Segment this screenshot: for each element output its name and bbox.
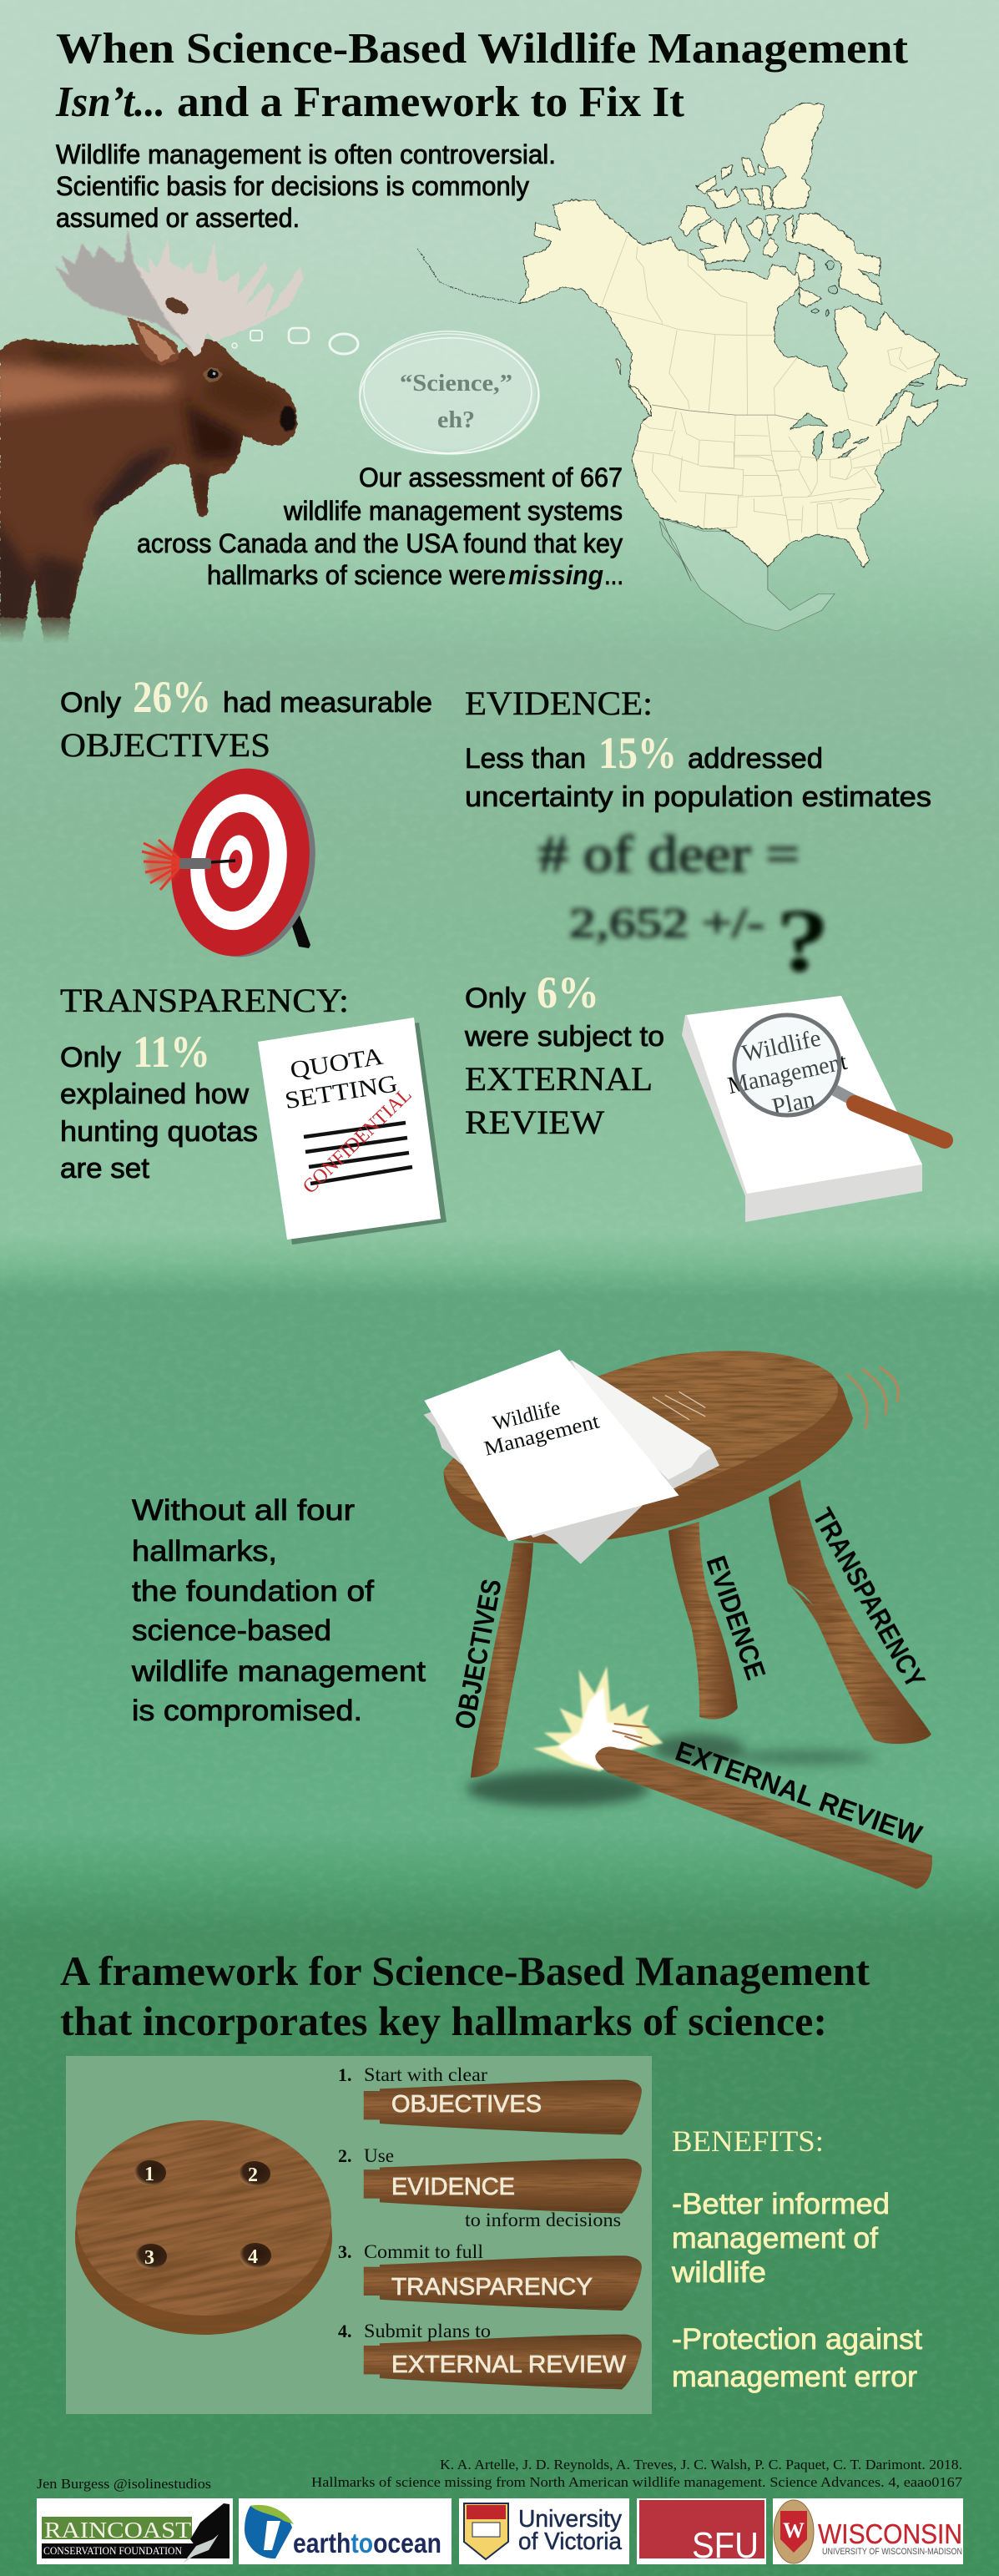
blurred deer estimate: # of deer = [538,826,800,883]
external review text [464,967,664,1141]
moose nose [280,407,295,432]
objectives text: Only [60,687,121,719]
step 3: 3. [338,2241,352,2262]
evidence text [465,684,931,813]
thought text: “Science,” [400,370,512,397]
step 2 [338,2145,642,2230]
objectives text: 26% [133,672,211,722]
title: Isn’t... [55,78,165,126]
seat side [444,1351,853,1543]
leg socket 1: 1 [144,2164,154,2185]
framework heading: that incorporates key hallmarks of science: [60,1998,827,2044]
transparency text: Only [60,1042,121,1073]
logo: University of Victoria: University [518,2506,622,2533]
logo: Wisconsin: W [783,2518,805,2543]
assessment text: ... [604,560,623,590]
moose coat shading [0,342,290,626]
leg: objectives [471,1543,533,1777]
benefits: management of [672,2222,878,2255]
compromised text: the foundation of [132,1575,374,1608]
logo: earthtoocean [239,2498,452,2564]
leg socket 1 [134,2160,166,2185]
antler hole [163,295,191,318]
assessment text: missing [508,560,603,590]
blurred deer estimate [538,826,830,991]
credits: Jen Burgess @isolinestudios [37,2476,211,2492]
step 4: 4. [338,2321,352,2341]
leg socket 3: 3 [144,2247,154,2269]
paper top [424,1350,679,1541]
intro text: assumed or asserted. [56,203,300,233]
panel: framework diagram [66,2056,652,2414]
objectives text: OBJECTIVES [60,726,270,764]
thought text: eh? [437,407,475,433]
redacted lines [304,1123,412,1184]
icon: target with dart [142,759,329,967]
benefits: -Protection against [672,2323,922,2356]
benefits: -Better informed [672,2188,890,2220]
seat top [444,1351,838,1510]
compromised text [131,1494,426,1727]
moose antlers [54,230,303,356]
logo: Wisconsin [773,2498,963,2564]
plan title: Wildlife [739,1025,823,1068]
assessment text: across Canada and the USA found that key [137,528,623,558]
step 1: Start with clear [364,2064,487,2085]
assessment text [137,462,623,590]
logo: University of Victoria [459,2498,629,2564]
benefits [671,2124,922,2393]
document heading: SETTING [283,1070,399,1114]
step 1: OBJECTIVES [391,2091,542,2118]
moose eye [204,368,222,381]
logo: Raincoast [37,2498,233,2564]
framework heading: A framework for Science-Based Management [60,1947,870,1994]
evidence text: Less than [465,743,586,775]
transparency text: 11% [133,1027,210,1077]
leg label: transparency: TRANSPARENCY [807,1503,931,1693]
transparency text [60,982,349,1184]
leg: evidence [669,1522,738,1720]
paper stack [682,996,922,1222]
land [417,103,966,567]
logo: Raincoast: RAINCOAST [44,2518,192,2543]
moose body [0,339,297,618]
evidence text: addressed [688,743,823,775]
paper title: Management [482,1410,602,1461]
icon: plan with magnifying glass [682,996,945,1222]
step 1 [338,2064,642,2134]
three-legged stool illustration [424,1350,932,1889]
step 2: to inform decisions [465,2210,621,2230]
step 3 [338,2241,642,2311]
title: When Science-Based Wildlife Management [56,25,909,73]
explosion [533,1666,663,1771]
dart [142,840,235,890]
step 1: 1. [338,2064,352,2085]
transparency text: are set [60,1153,150,1184]
moose inner ear [136,323,175,361]
intro text [56,139,556,233]
target stand [285,904,310,948]
step 4: EXTERNAL REVIEW [391,2351,627,2378]
assessment text: hallmarks of science were [207,560,506,590]
blurred deer estimate: 2,652 +/- [569,899,764,946]
framework heading [60,1947,870,2044]
step 3: Commit to full [364,2241,483,2262]
leg socket 4: 4 [248,2246,258,2268]
thought text [400,370,512,433]
step 3: TRANSPARENCY [391,2274,593,2301]
assessment text: wildlife management systems [283,496,623,526]
thought bubbles [232,327,542,459]
benefits: BENEFITS: [672,2124,824,2158]
wooden seat disc [75,2120,332,2335]
thought cloud [361,336,537,452]
lakes [790,260,923,461]
icon: confidential quota document [258,1018,447,1245]
leg label: external review: EXTERNAL REVIEW [672,1735,926,1851]
transparency text: TRANSPARENCY: [60,982,349,1019]
papers under [424,1360,719,1564]
title [55,25,909,126]
paper title: Wildlife [491,1397,563,1435]
floor shadows [467,1735,874,1806]
external review text: 6% [537,967,599,1018]
transparency text: hunting quotas [60,1116,258,1148]
logo: Raincoast: CONSERVATION FOUNDATION [43,2544,183,2557]
leg label: objectives: OBJECTIVES [449,1577,507,1731]
credits [37,2457,963,2492]
step 2: 2. [338,2145,352,2166]
logo: University of Victoria: of Victoria [518,2528,623,2555]
antler shadow [54,230,194,353]
fallen leg [595,1747,932,1889]
compromised text: wildlife management [131,1655,426,1688]
leg socket 4 [240,2243,271,2268]
leg: transparency [769,1480,931,1744]
objectives text: had measurable [223,687,432,719]
Mexico [659,519,835,631]
paper middle [572,1360,710,1480]
leg label: evidence: EVIDENCE [700,1552,772,1684]
compromised text: is compromised. [132,1695,362,1727]
plan title: Plan [769,1086,818,1121]
document heading [279,1042,399,1114]
logo: Wisconsin: WISCONSIN [818,2518,962,2549]
target face [158,759,329,967]
lens [734,1015,840,1115]
paper title [477,1388,602,1461]
compromised text: Without all four [132,1494,355,1527]
leg socket 3 [135,2244,167,2269]
credits: Hallmarks of science missing from North American wildlife management. Science Advances. 4, eaao0167 [311,2474,963,2490]
document heading: QUOTA [288,1043,385,1084]
handle [835,1090,945,1140]
scratches [653,1392,705,1420]
plan title [719,1020,855,1129]
external review text: EXTERNAL [465,1060,653,1098]
moose ear [127,317,178,366]
step 2: Use [364,2145,394,2166]
confidential stamp: CONFIDENTIAL [299,1084,416,1198]
logo: earthtoocean: earthtoocean [293,2528,441,2558]
evidence text: uncertainty in population estimates [465,781,931,813]
logo: SFU: SFU [692,2525,759,2566]
step 4: Submit plans to [364,2321,491,2341]
moose [0,230,303,643]
thought cloud outline [356,327,542,459]
intro text: Wildlife management is often controversial. [56,139,556,169]
plan title: Management [725,1048,850,1099]
assessment text: Our assessment of 667 [359,462,623,492]
external review text: were subject to [464,1021,664,1053]
compromised text: hallmarks, [132,1535,277,1568]
title: and a Framework to Fix It [177,78,685,126]
credits: K. A. Artelle, J. D. Reynolds, A. Treves, J. C. Walsh, P. C. Paquet, C. T. Darimont. 2018. [440,2457,962,2472]
benefits: management error [672,2361,917,2393]
leg crack [788,1583,815,1606]
leg socket 2 [239,2161,270,2186]
compromised text: science-based [132,1614,331,1647]
step 4 [338,2321,642,2389]
external review text: REVIEW [465,1104,604,1141]
borders [602,235,936,542]
external review text: Only [465,982,526,1014]
transparency text: explained how [60,1078,249,1110]
map: North America [417,103,966,631]
benefits: wildlife [671,2256,766,2289]
evidence text: 15% [598,728,677,778]
objectives text [60,672,432,764]
evidence text: EVIDENCE: [465,684,653,722]
blurred deer estimate: ? [776,891,830,991]
leg socket 2: 2 [248,2164,258,2186]
moose legs fading [0,609,71,643]
step 2: EVIDENCE [391,2174,515,2200]
logo: SFU [637,2498,766,2566]
logo: Wisconsin: UNIVERSITY OF WISCONSIN-MADISON [822,2547,962,2557]
intro text: Scientific basis for decisions is commonly [56,171,529,201]
vibration marks [846,1367,898,1429]
